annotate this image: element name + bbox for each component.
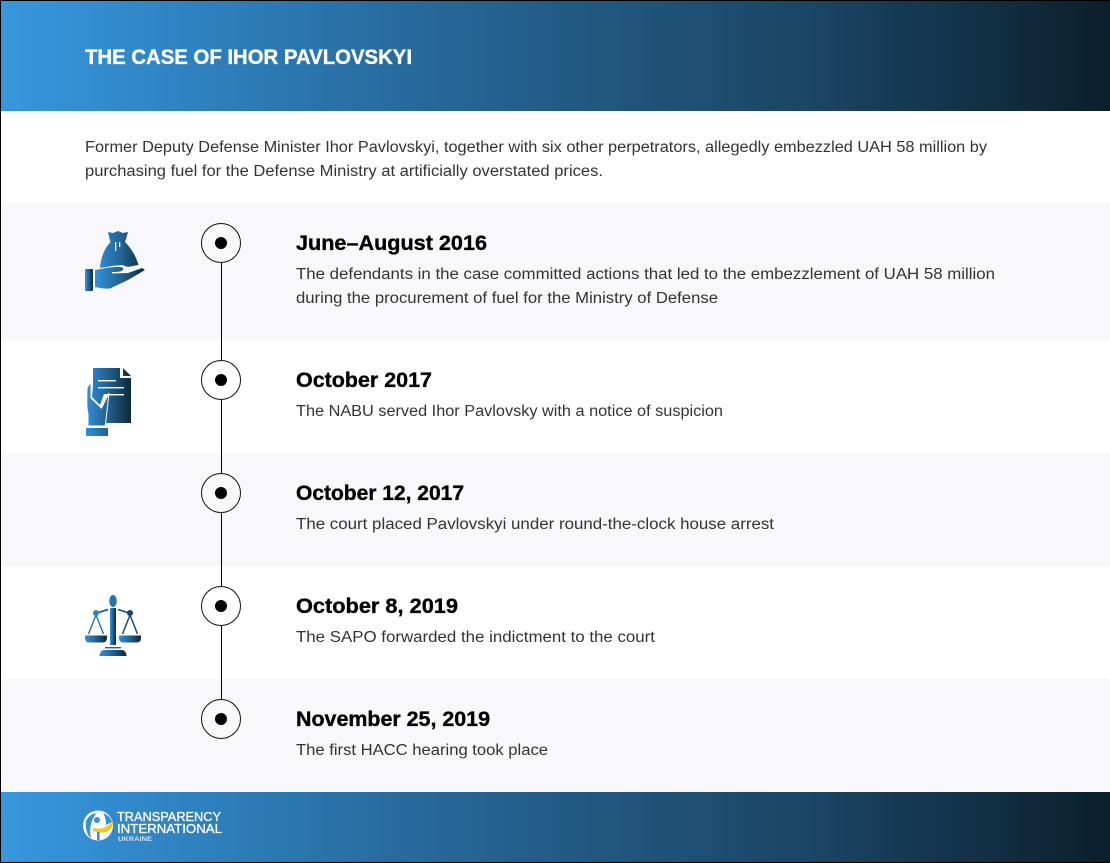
entry: October 8, 2019: The SAPO forwarded the indictment to the court [296,629,656,646]
icon: scales of justice [85,595,141,656]
intro text [85,139,987,180]
row band: October 12, 2017 [1,453,1110,566]
logo: Transparency International Ukraine: TRANSPARENCY [117,809,221,824]
entry: October 12, 2017 [296,482,775,533]
timeline marker 1 [202,224,240,262]
intro text: Former Deputy Defense Minister Ihor Pavlovskyi, together with six other perpetrators, allegedly embezzled UAH 58 million by [85,139,987,156]
timeline line [220,243,222,719]
logo: Transparency International Ukraine [83,809,222,843]
entry: November 25, 2019: The first HACC hearing took place [296,742,548,759]
row band: June–August 2016 [1,203,1110,340]
entry: June–August 2016: The defendants in the case committed actions that led to the embezzlement of UAH 58 million [296,266,995,283]
entry: June–August 2016: June–August 2016 [296,232,487,255]
entry: October 2017 [296,369,723,420]
logo: Transparency International Ukraine: UKRAINE [118,836,153,843]
icon: money bag on hand [85,231,145,291]
header banner [1,1,1110,111]
timeline marker 3 [202,474,240,512]
entry: June–August 2016: during the procurement of fuel for the Ministry of Defense [296,290,718,307]
timeline marker 4 [202,586,240,626]
entry: June–August 2016 [296,232,995,307]
timeline marker 5 [202,700,240,738]
entry: November 25, 2019: November 25, 2019 [296,708,490,731]
icon: hand holding document [86,368,131,436]
entry: November 25, 2019 [296,708,548,759]
entry: October 12, 2017: October 12, 2017 [296,482,464,505]
title: THE CASE OF IHOR PAVLOVSKYI [85,46,412,69]
row band: November 25, 2019 [1,679,1110,792]
entry: October 2017: October 2017 [296,369,432,392]
logo: Transparency International Ukraine: INTERNATIONAL [117,821,222,836]
entry: October 12, 2017: The court placed Pavlovskyi under round-the-clock house arrest [296,516,775,533]
entry: October 8, 2019: October 8, 2019 [296,595,458,618]
intro text: purchasing fuel for the Defense Ministry at artificially overstated prices. [85,163,603,180]
footer banner [1,792,1110,862]
entry: October 2017: The NABU served Ihor Pavlovsky with a notice of suspicion [296,403,723,420]
entry: October 8, 2019 [296,595,656,646]
timeline marker 2 [202,360,240,400]
